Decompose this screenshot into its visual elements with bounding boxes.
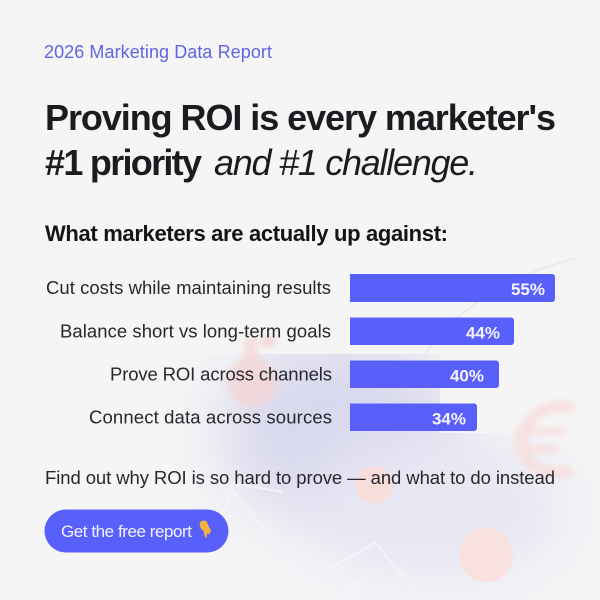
button <box>44 510 228 552</box>
row: prove ROI: Prove ROI across channels <box>110 364 332 384</box>
eyebrow: 2026 Marketing Data Report <box>44 42 272 62</box>
section heading: What marketers are actually up against: <box>45 221 448 246</box>
title: Proving ROI is every marketer's <box>45 97 556 138</box>
title <box>45 97 556 183</box>
row: balance goals: Balance short vs long-term goals <box>60 320 331 342</box>
faded dollar symbol <box>227 336 277 407</box>
row: cut costs <box>46 274 555 302</box>
faded euro symbol <box>514 406 574 472</box>
row: cut costs: 55% <box>511 280 545 299</box>
row: balance goals: 44% <box>466 324 500 342</box>
row: balance goals <box>60 318 514 345</box>
white trend line <box>225 483 424 600</box>
button: Get the free report <box>61 522 192 541</box>
pink circles <box>355 466 513 582</box>
row: connect data: 34% <box>432 410 466 428</box>
title: and #1 challenge. <box>214 142 478 183</box>
bar chart <box>46 274 555 431</box>
faded arc <box>424 258 578 356</box>
row: prove ROI <box>110 360 499 388</box>
row: connect data: Connect data across sources <box>89 406 332 428</box>
row: connect data <box>89 404 477 431</box>
call to action text: Find out why ROI is so hard to prove — and what to do instead <box>45 467 555 488</box>
title: #1 priority <box>45 142 202 183</box>
row: prove ROI: 40% <box>450 366 484 386</box>
row: cut costs: Cut costs while maintaining results <box>46 277 331 298</box>
icon: pointing down hand <box>200 520 211 538</box>
decorative blob and faded chart <box>220 258 578 600</box>
